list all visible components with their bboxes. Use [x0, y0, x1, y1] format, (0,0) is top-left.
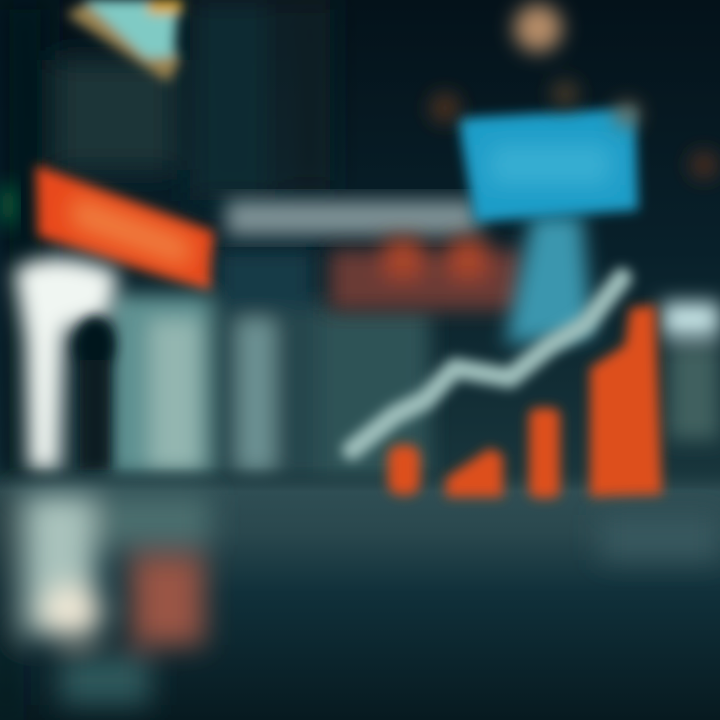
top-left sign — [66, 0, 182, 82]
grey banner — [226, 200, 478, 236]
background wall — [0, 0, 720, 500]
dim red bars — [330, 238, 525, 310]
pale storefront — [110, 250, 430, 480]
left building — [0, 0, 330, 480]
orange bar chart — [388, 305, 662, 498]
small green light — [0, 183, 16, 227]
floor reflections — [0, 490, 720, 720]
blue sign — [458, 108, 638, 222]
orange sign — [36, 165, 214, 292]
line chart — [352, 278, 622, 450]
floor — [0, 466, 720, 720]
blue sign stem — [505, 215, 592, 345]
dark figure — [75, 317, 115, 470]
right window — [662, 302, 720, 440]
white doorway — [14, 258, 118, 470]
bokeh lights — [430, 4, 718, 179]
